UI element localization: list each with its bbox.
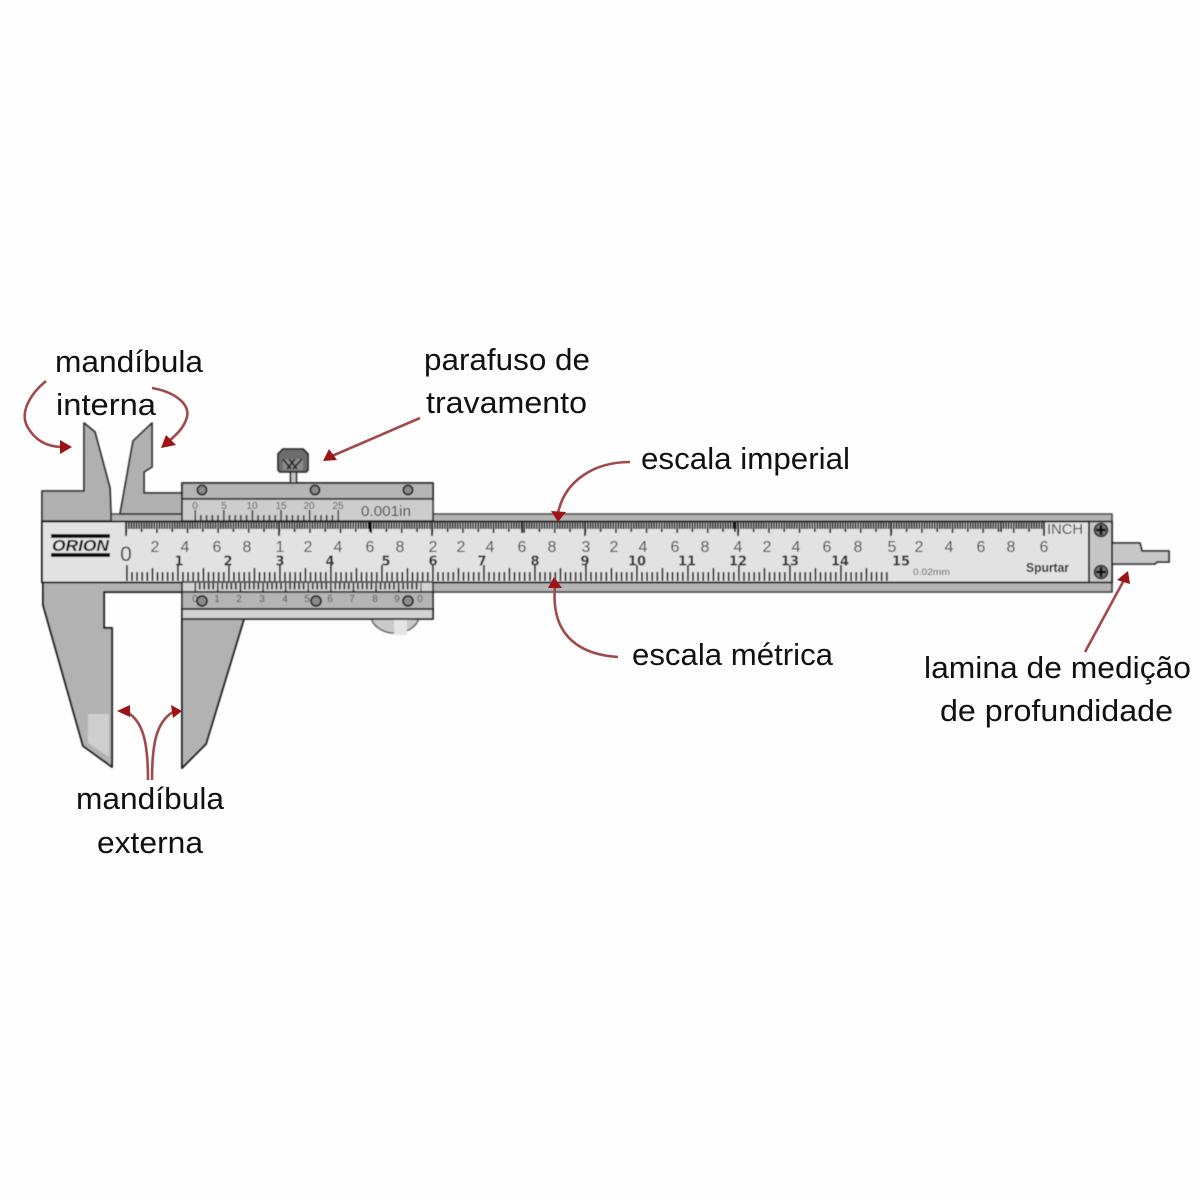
locking screw — [278, 449, 308, 483]
imperial numbers: 6 — [366, 539, 375, 556]
metric numbers: 14 — [831, 554, 849, 570]
INCH label: INCH — [1047, 521, 1083, 538]
metric numbers: 8 — [530, 554, 540, 570]
imperial numbers: 4 — [486, 539, 495, 556]
lower vernier numbers: 2 — [236, 594, 242, 605]
imperial ticks — [126, 522, 1044, 536]
arrow: imperial scale — [551, 462, 630, 522]
label: lamina de medição de profundidade: de profundidade — [940, 693, 1173, 728]
imperial numbers: 6 — [213, 539, 222, 556]
arrow: outer jaw left — [117, 705, 148, 780]
upper vernier unit: 0.001in — [361, 504, 411, 520]
imperial numbers: 4 — [639, 539, 648, 556]
logo: ORION — [51, 534, 110, 557]
metric numbers: 2 — [223, 554, 233, 570]
metric numbers — [174, 554, 910, 570]
main scale body — [42, 522, 1089, 582]
upper slider screws — [197, 485, 413, 495]
imperial numbers: 3 — [582, 539, 591, 556]
arrow: outer jaw right — [152, 705, 182, 780]
imperial numbers: 6 — [518, 539, 527, 556]
end cap — [1089, 522, 1112, 582]
upper vernier numbers — [192, 501, 344, 512]
label: escala imperial: escala imperial — [641, 441, 850, 476]
fixed jaw highlight — [88, 714, 109, 757]
metric numbers: 5 — [381, 554, 391, 570]
upper rail — [111, 514, 1112, 522]
logo: ORION: ORION — [52, 538, 109, 555]
upper slider — [182, 483, 433, 521]
label: parafuso de travamento: travamento — [426, 385, 587, 420]
arrow: depth blade — [1085, 571, 1130, 652]
label: parafuso de travamento: parafuso de — [424, 342, 590, 377]
imperial numbers: 2 — [304, 539, 313, 556]
metric numbers: 10 — [628, 554, 646, 570]
lower vernier numbers: 1 — [214, 594, 220, 605]
arrow: inner jaw left — [25, 381, 72, 454]
upper vernier numbers: 0 — [192, 501, 198, 512]
lower vernier numbers: 5 — [304, 594, 310, 605]
imperial numbers: 8 — [854, 539, 863, 556]
metric numbers: 3 — [275, 554, 285, 570]
resolution: 0.02mm: 0.02mm — [913, 567, 950, 578]
imperial numbers: 6 — [1040, 539, 1049, 556]
lower vernier numbers: 6 — [327, 594, 333, 605]
imperial numbers: 4 — [334, 539, 343, 556]
metric numbers: 12 — [729, 554, 747, 570]
imperial numbers: 8 — [243, 539, 252, 556]
arrow: locking screw — [323, 418, 420, 461]
fixed outer jaw — [43, 582, 182, 767]
metric ticks — [126, 565, 891, 581]
imperial numbers: 8 — [701, 539, 710, 556]
lower vernier ticks — [194, 583, 422, 593]
imperial numbers: 6 — [977, 539, 986, 556]
imperial numbers: 2 — [151, 539, 160, 556]
metric numbers: 6 — [428, 554, 438, 570]
imperial numbers: 2 — [915, 539, 924, 556]
imperial numbers — [151, 539, 1049, 556]
imperial numbers: 2 — [457, 539, 466, 556]
upper vernier numbers: 25 — [332, 501, 344, 512]
label: parafuso de travamento — [424, 342, 590, 420]
lower slider screws — [197, 596, 413, 606]
imperial numbers: 2 — [610, 539, 619, 556]
label: mandíbula interna: mandíbula — [55, 344, 204, 379]
label: mandíbula externa — [76, 781, 225, 860]
imperial numbers: 5 — [888, 539, 897, 556]
label: mandíbula externa: externa — [97, 825, 204, 860]
metric numbers: 4 — [325, 554, 335, 570]
imperial numbers: 4 — [792, 539, 801, 556]
imperial numbers: 1 — [276, 539, 285, 556]
imperial numbers: 4 — [734, 539, 743, 556]
lower rail — [104, 582, 1112, 592]
imperial numbers: 8 — [548, 539, 557, 556]
lower vernier numbers: 3 — [259, 594, 265, 605]
label: escala métrica: escala métrica — [632, 637, 834, 672]
imperial numbers: 2 — [763, 539, 772, 556]
imperial numbers: 2 — [429, 539, 438, 556]
imperial numbers: 6 — [823, 539, 832, 556]
zero mark: 0 — [120, 543, 132, 566]
metric numbers: 13 — [781, 554, 799, 570]
lower vernier numbers: 8 — [372, 594, 378, 605]
imperial numbers: 8 — [1007, 539, 1016, 556]
imperial numbers: 8 — [396, 539, 405, 556]
label: lamina de medição de profundidade: lamina de medição — [924, 650, 1191, 685]
lower vernier numbers: 0 — [192, 594, 198, 605]
upper vernier ticks — [194, 510, 340, 521]
lower vernier numbers — [192, 594, 423, 605]
metric numbers: 1 — [174, 554, 184, 570]
fixed inner jaw — [42, 423, 111, 521]
lower slider — [182, 582, 433, 619]
upper vernier numbers: 15 — [275, 501, 287, 512]
lower vernier numbers: 4 — [282, 594, 288, 605]
metric numbers: 7 — [477, 554, 487, 570]
imperial numbers: 4 — [181, 539, 190, 556]
label: lamina de medição de profundidade — [924, 650, 1191, 728]
lower vernier numbers: 0 — [417, 594, 423, 605]
imperial numbers: 6 — [671, 539, 680, 556]
moving inner jaw — [120, 423, 182, 514]
metric numbers: 9 — [580, 554, 590, 570]
metric numbers: 15 — [892, 554, 910, 570]
label: mandíbula externa: mandíbula — [76, 781, 225, 816]
lower vernier numbers: 9 — [394, 594, 400, 605]
lower vernier numbers: 7 — [349, 594, 355, 605]
end cap screws — [1094, 524, 1108, 578]
upper vernier numbers: 20 — [303, 501, 315, 512]
upper vernier numbers: 5 — [221, 501, 227, 512]
upper vernier numbers: 10 — [246, 501, 258, 512]
imperial numbers: 4 — [945, 539, 954, 556]
arrow: inner jaw right — [152, 388, 187, 448]
brand: Spurtar: Spurtar — [1026, 561, 1069, 575]
arrow: metric scale — [548, 577, 618, 657]
metric numbers: 11 — [678, 554, 696, 570]
caliper — [42, 423, 1169, 768]
label: mandíbula interna — [55, 344, 204, 422]
depth blade — [1112, 543, 1169, 564]
thumb wheel — [371, 618, 419, 635]
moving outer jaw — [182, 619, 244, 768]
label: mandíbula interna: interna — [56, 387, 157, 422]
